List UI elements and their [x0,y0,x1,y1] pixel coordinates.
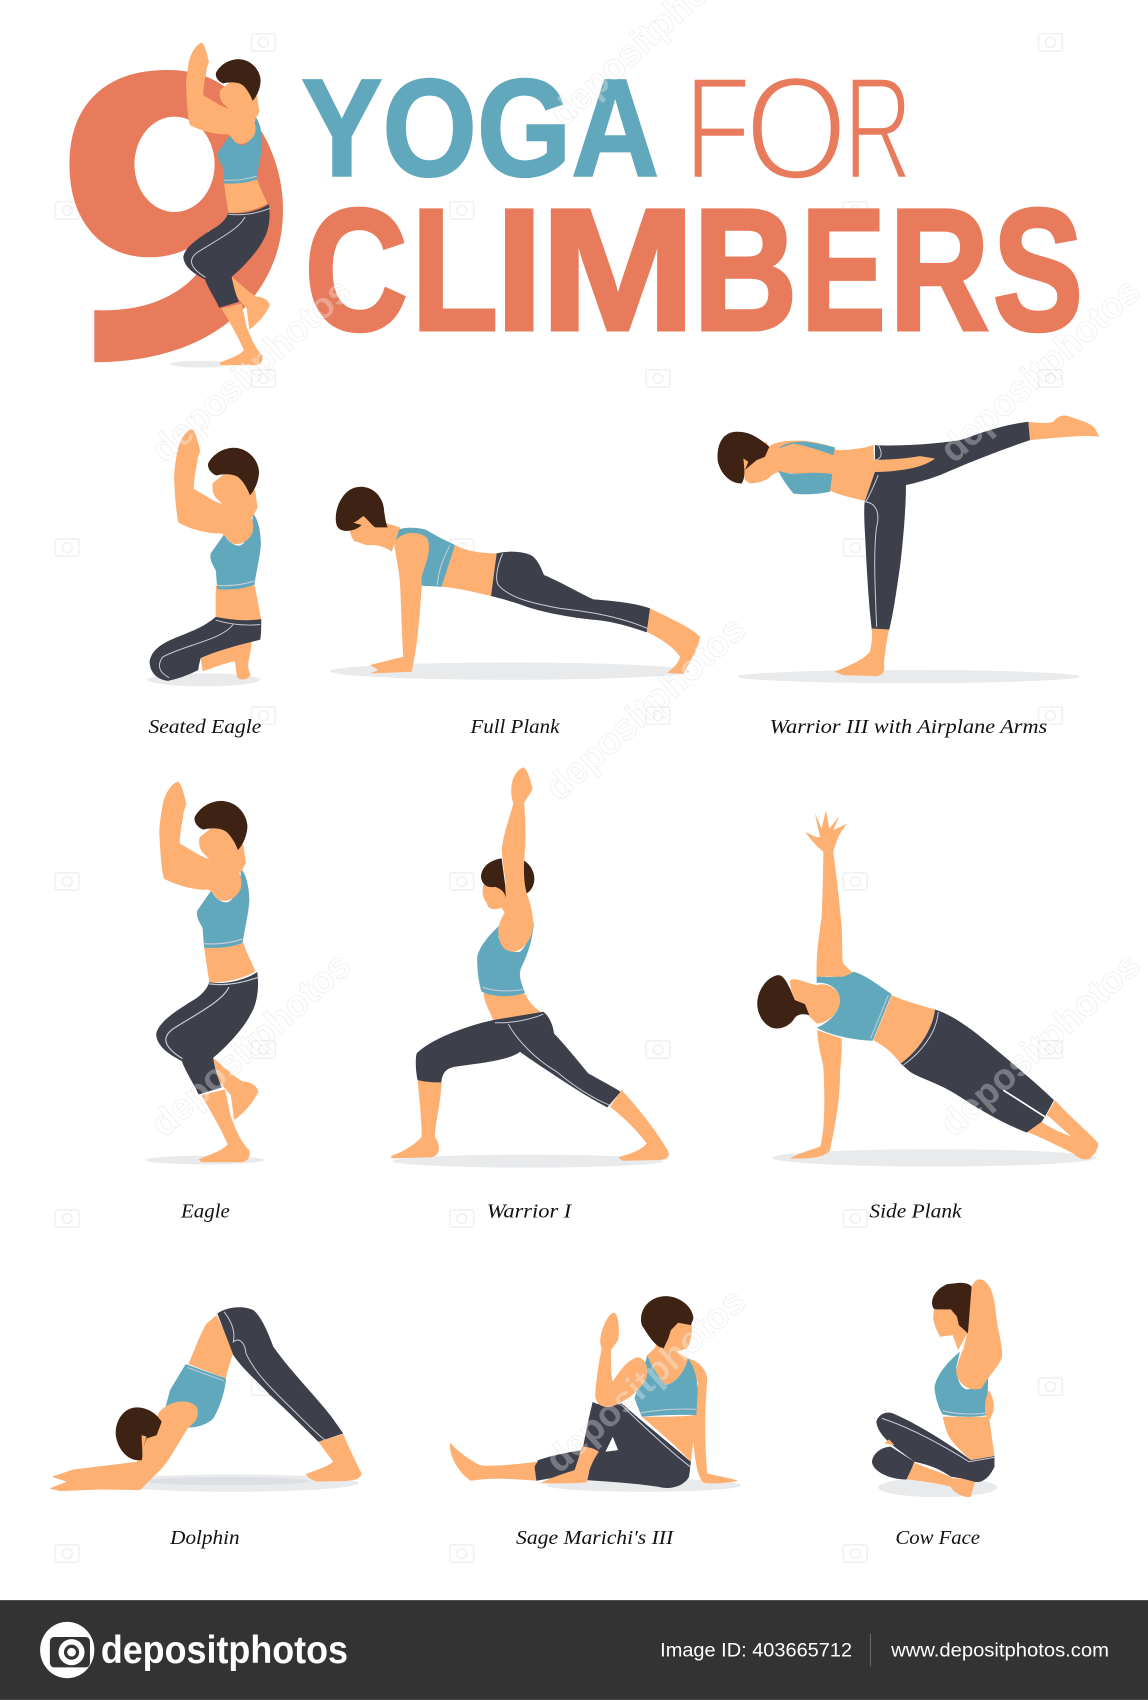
figure [757,810,1098,1159]
image id: Image ID: 403665712 [660,1640,852,1662]
logo wordmark: depositphotos [101,1629,348,1672]
caption: Full Plank [469,717,560,738]
numeral 9: 9 [55,0,282,442]
figure [450,1296,738,1488]
title line: CLIMBERS: M [540,173,695,367]
floor shadow [107,1474,359,1492]
title line: YOGA: YOGA [301,51,659,206]
figure [49,1307,362,1491]
caption: Cow Face [895,1528,980,1549]
title line: FOR: F [684,47,751,211]
pose: Warrior III with Airplane Arms [718,415,1099,738]
title line: CLIMBERS: C [305,173,408,367]
numeral 9 [69,70,283,362]
floor shadow [392,1155,663,1168]
pose: Full Plank [330,487,700,738]
caption: Eagle [180,1201,230,1222]
caption: Warrior III with Airplane Arms [770,717,1047,738]
title figure: eagle pose [170,43,270,367]
pose: Sage Marichi's III [450,1296,741,1549]
watermarks: depositphotos [932,944,1148,1144]
title line: FOR: O [745,47,848,211]
watermarks: depositphotos [932,270,1148,470]
pose: Dolphin [49,1307,362,1549]
floor shadow [147,673,260,686]
floor shadow [878,1478,997,1497]
watermark camera icons [55,34,1062,1562]
figure [150,429,261,681]
title [69,42,1080,368]
watermarks: depositphotos [537,1280,753,1480]
figure [872,1279,1002,1497]
title line: CLIMBERS: B [693,173,797,367]
watermarks: depositphotos [143,270,359,470]
watermarks: depositphotos [537,608,753,808]
title line: CLIMBERS: S [993,173,1083,367]
floor shadow [145,1156,265,1164]
title line: CLIMBERS: R [889,173,989,367]
pose: Cow Face [872,1279,1002,1549]
watermarks [143,0,1148,1480]
website: www.depositphotos.com [890,1640,1109,1662]
caption: Sage Marichi's III [516,1528,675,1549]
floor shadow [737,670,1080,683]
watermarks: depositphotos [143,944,359,1144]
floor shadow [772,1149,1097,1167]
caption: Seated Eagle [149,717,262,738]
figure [336,487,700,674]
icon: camera logo [40,1622,94,1678]
pose: Warrior I [391,767,669,1222]
floor shadow [546,1479,741,1492]
title line: CLIMBERS: E [801,173,886,367]
caption: Side Plank [869,1201,962,1222]
footer band [0,1600,1148,1700]
figure [391,767,669,1161]
title line: FOR: R [843,47,913,211]
title line: CLIMBERS: I [495,173,543,367]
pose: Side Plank [757,810,1098,1222]
pose: Eagle [145,782,265,1222]
floor shadow [330,662,690,680]
figure [718,415,1099,676]
caption: Dolphin [169,1528,240,1549]
figure [156,782,258,1162]
pose: Seated Eagle [147,429,262,738]
caption: Warrior I [487,1201,573,1222]
title line: CLIMBERS: L [411,173,498,367]
